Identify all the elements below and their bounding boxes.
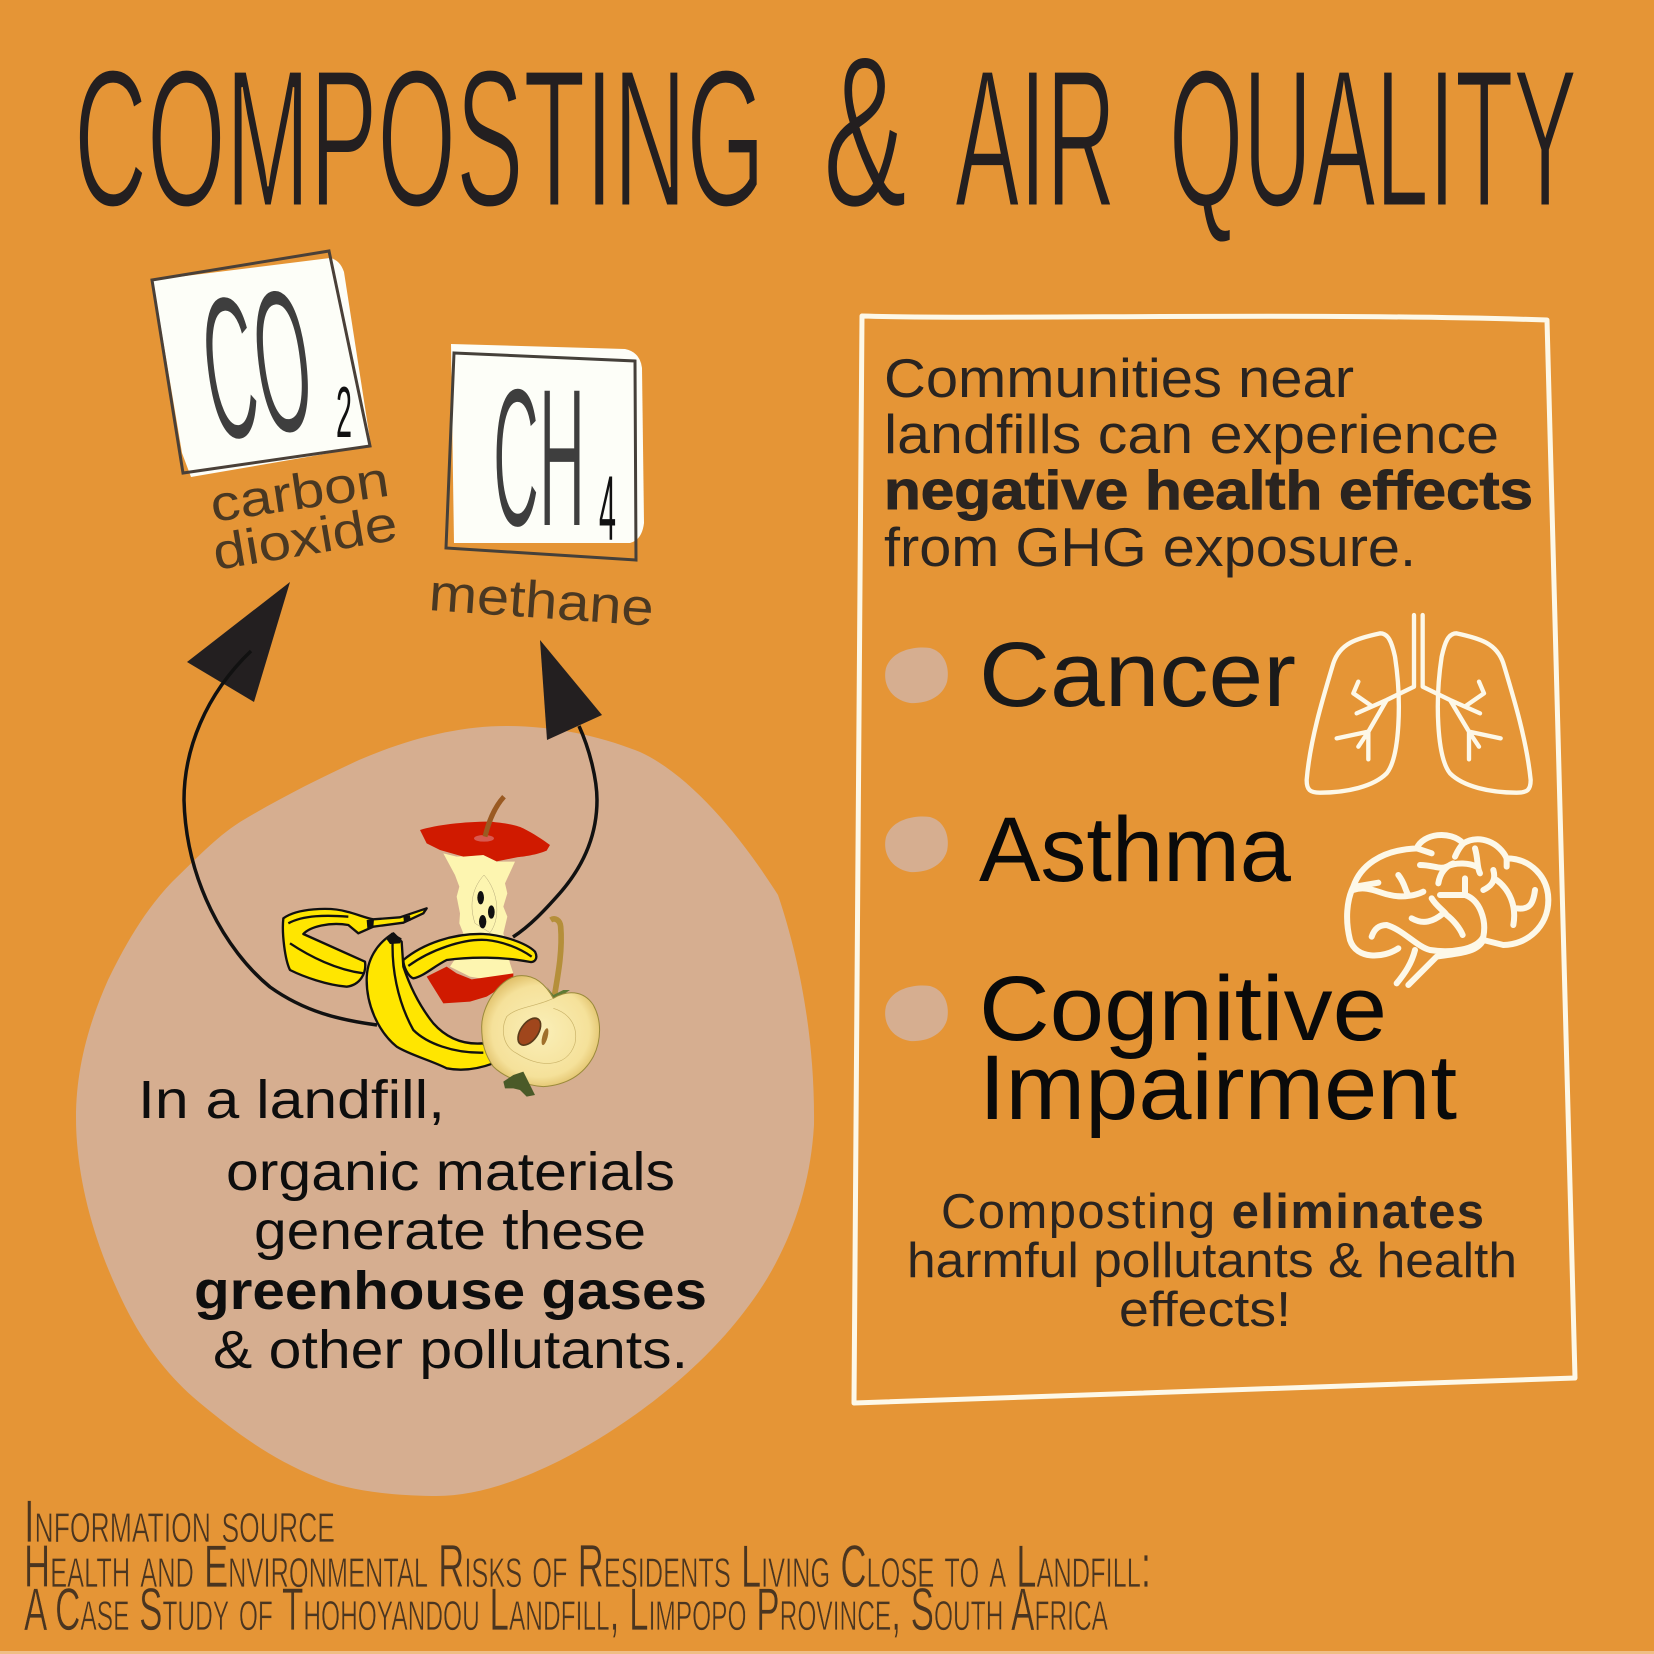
- label: carbon dioxide: [206, 451, 401, 581]
- text block: information source: Information source: [24, 1488, 335, 1555]
- card: CH4: 4: [599, 458, 616, 560]
- arrow: to carbon dioxide: [184, 582, 377, 1025]
- text block: landfill explanation: greenhouse gases: [194, 1261, 707, 1321]
- text block: information source: [24, 1488, 1151, 1643]
- text block: communities: landfills can experience: [884, 403, 1499, 465]
- text block: composting eliminates: Composting eliminates: [941, 1185, 1484, 1239]
- text block: communities: negative health effects: [884, 459, 1533, 521]
- arrow: to methane: [513, 640, 602, 937]
- title: &: [823, 10, 907, 252]
- label: carbon dioxide: carbon: [206, 451, 393, 533]
- text block: composting eliminates: harmful pollutants & health: [907, 1234, 1517, 1288]
- card: CH4: CH: [493, 347, 585, 568]
- icon: brain: [1347, 835, 1548, 985]
- text block: communities: from GHG exposure.: [884, 516, 1416, 578]
- text block: landfill explanation: & other pollutants.: [213, 1320, 688, 1380]
- card: CH4: [446, 344, 644, 568]
- label: methane: methane: [427, 564, 656, 638]
- card: CO2: CO: [191, 245, 324, 485]
- icon: apple core: [420, 797, 550, 1003]
- text block: landfill explanation: generate these: [254, 1201, 646, 1261]
- bullet: cancer: Cancer: [979, 624, 1296, 726]
- title: AIR: [955, 29, 1116, 248]
- text block: composting eliminates: [907, 1185, 1517, 1337]
- panel: health effects frame: [854, 316, 1575, 1403]
- text block: communities: Communities near: [884, 347, 1354, 409]
- text block: landfill explanation: In a landfill,: [138, 1070, 445, 1130]
- bullet: asthma: Asthma: [979, 799, 1292, 901]
- text block: landfill explanation: [138, 1070, 707, 1380]
- icon: food scraps: [283, 797, 600, 1097]
- bullet: cognitive impairment: Impairment: [979, 1037, 1457, 1139]
- icon: lungs: [1307, 615, 1531, 793]
- icon: banana peel: [283, 908, 536, 1070]
- title: COMPOSTING: [74, 29, 765, 248]
- label: carbon dioxide: dioxide: [209, 495, 401, 581]
- text block: landfill explanation: organic materials: [226, 1142, 675, 1202]
- bullet: cognitive impairment: Cognitive: [979, 958, 1387, 1060]
- card: CO2: [152, 245, 371, 485]
- text block: communities: [884, 347, 1533, 578]
- bullet: cognitive impairment: [885, 958, 1457, 1139]
- text block: composting eliminates: effects!: [1119, 1283, 1291, 1337]
- card: CO2: 2: [336, 373, 352, 453]
- icon: half apple: [482, 919, 600, 1097]
- panel: landfill blob: [76, 726, 814, 1496]
